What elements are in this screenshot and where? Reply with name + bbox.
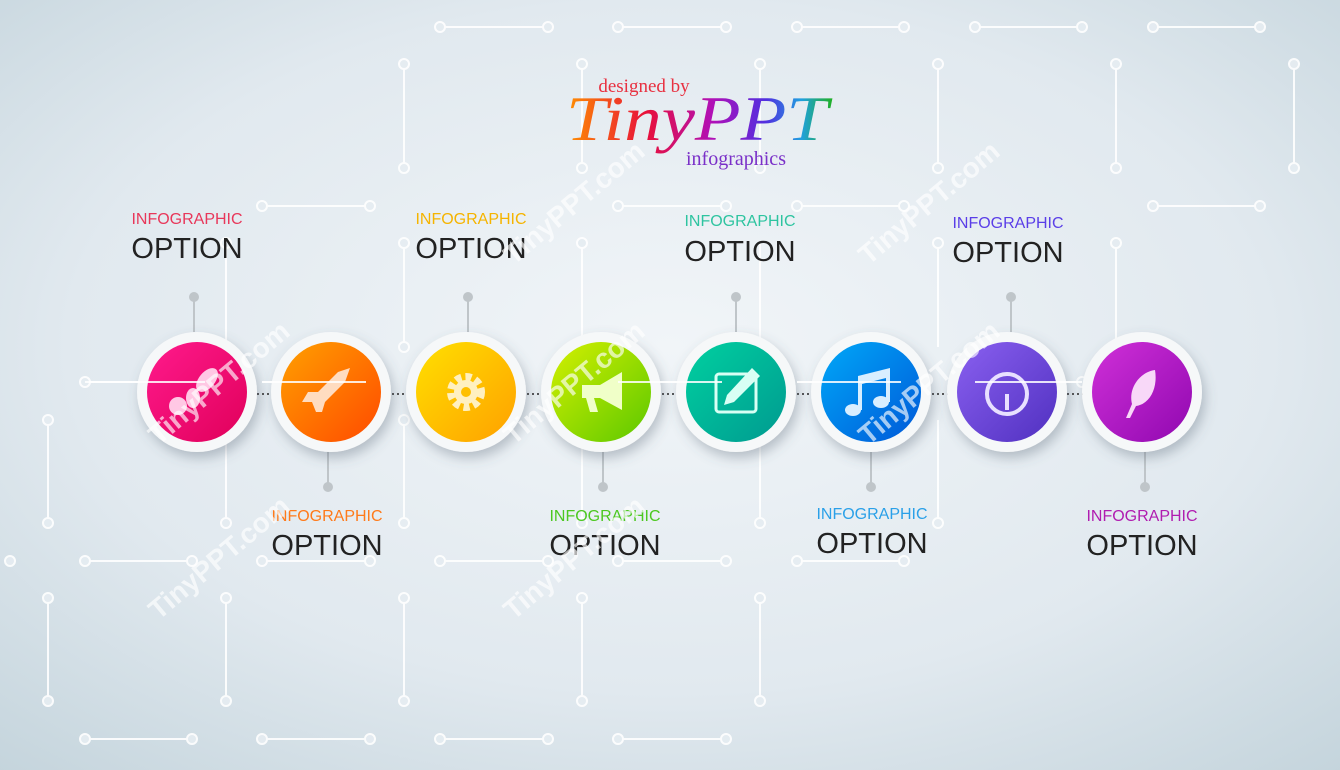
circle 1: pink [137, 332, 257, 452]
watermarks: TinyPPT.com [142, 315, 295, 450]
label 3: OPTION [415, 233, 527, 265]
label 5: INFOGRAPHIC [684, 213, 796, 230]
circle 6: blue [811, 332, 931, 452]
label 2: OPTION [271, 530, 383, 562]
connectors [190, 293, 1149, 491]
label 4: OPTION [549, 530, 661, 562]
label 4 [549, 508, 661, 562]
circle 5: teal [676, 332, 796, 452]
label 6 [816, 506, 928, 560]
dotted timeline [197, 393, 1142, 395]
label 7: INFOGRAPHIC [952, 215, 1064, 232]
circle 3: yellow [406, 332, 526, 452]
watermarks [142, 135, 1005, 625]
circle 8: magenta [1082, 332, 1202, 452]
logo [566, 76, 833, 170]
label 6: OPTION [816, 528, 928, 560]
watermarks: TinyPPT.com [497, 315, 650, 450]
label 1: OPTION [131, 233, 243, 265]
label 5: OPTION [684, 236, 796, 268]
icon: gear [451, 377, 481, 407]
circle 7: purple [947, 332, 1067, 452]
icon: feather [1126, 370, 1156, 418]
icon: gauge [987, 374, 1027, 414]
watermarks: TinyPPT.com [497, 490, 650, 625]
label 2 [271, 508, 383, 562]
label 1 [131, 211, 243, 265]
logo: infographics [686, 148, 786, 170]
circle 2: orange [271, 332, 391, 452]
watermarks: TinyPPT.com [852, 135, 1005, 270]
watermarks: TinyPPT.com [852, 315, 1005, 450]
label 7 [952, 215, 1064, 269]
label 1: INFOGRAPHIC [131, 211, 243, 228]
logo: TinyPPT [566, 83, 833, 154]
label 8: OPTION [1086, 530, 1198, 562]
label 6: INFOGRAPHIC [816, 506, 928, 523]
icon: pencil [716, 374, 756, 412]
white crossing lines over circles [85, 381, 1082, 383]
label 7: OPTION [952, 237, 1064, 269]
label 8 [1086, 508, 1198, 562]
label 8: INFOGRAPHIC [1086, 508, 1198, 525]
label 4: INFOGRAPHIC [549, 508, 661, 525]
label 3: INFOGRAPHIC [415, 211, 527, 228]
watermarks: TinyPPT.com [142, 490, 295, 625]
label 5 [684, 213, 796, 268]
icon: megaphone [582, 372, 622, 412]
label 3 [415, 211, 527, 265]
logo: designed by [598, 76, 690, 97]
watermarks: TinyPPT.com [497, 135, 650, 270]
icon: rocket [302, 368, 350, 412]
label 2: INFOGRAPHIC [271, 508, 383, 525]
circle 4: lime [541, 332, 661, 452]
icon: horse [169, 364, 222, 415]
icon: music [845, 368, 890, 416]
